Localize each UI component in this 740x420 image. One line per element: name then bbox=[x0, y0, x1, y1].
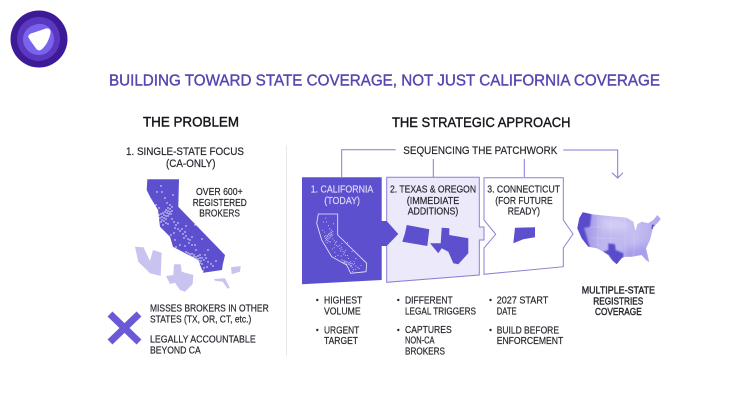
text: problem consequences: MISSES BROKERS IN OTHER bbox=[150, 303, 269, 315]
label: multiple-state registries coverage bbox=[582, 284, 655, 318]
label: over 600+ registered brokers: OVER 600+ bbox=[196, 186, 243, 198]
panel: the strategic approach bbox=[302, 114, 663, 357]
step 2 label: 2. TEXAS & OREGON bbox=[390, 184, 476, 196]
connector lines bbox=[342, 150, 524, 177]
label: multiple-state registries coverage: COVERAGE bbox=[595, 306, 642, 318]
text: problem consequences: STATES (TX, OR, CT, etc.) bbox=[150, 314, 251, 326]
text: problem consequences: BEYOND CA bbox=[150, 344, 201, 356]
map: California outline with dots bbox=[317, 214, 367, 273]
list: Texas and Oregon bullets: NON-CA bbox=[405, 334, 434, 346]
heading: the strategic approach: THE STRATEGIC APPROACH bbox=[392, 114, 570, 130]
step 3: Connecticut bbox=[484, 178, 573, 274]
step 2 label: (IMMEDIATE bbox=[407, 195, 459, 207]
map: Connecticut bbox=[513, 227, 535, 243]
list: Texas and Oregon bullets: BROKERS bbox=[405, 345, 445, 357]
list: Connecticut bullets bbox=[489, 294, 564, 347]
map: Texas bbox=[430, 228, 468, 264]
step 1 label: 1. CALIFORNIA bbox=[311, 184, 373, 196]
map: United States coverage bbox=[577, 212, 660, 264]
label: over 600+ registered brokers: REGISTERED bbox=[193, 197, 247, 209]
list: Connecticut bullets: ENFORCEMENT bbox=[497, 335, 564, 347]
label: over 600+ registered brokers bbox=[193, 186, 247, 220]
label: sequencing the patchwork: SEQUENCING THE PATCHWORK bbox=[403, 145, 558, 157]
step 3 label bbox=[487, 184, 560, 218]
list: California bullets bbox=[316, 294, 363, 347]
list: Texas and Oregon bullets: CAPTURES bbox=[405, 324, 452, 336]
list: Texas and Oregon bullets: LEGAL TRIGGERS bbox=[405, 305, 476, 317]
heading: the problem: THE PROBLEM bbox=[143, 114, 239, 130]
infographic canvas bbox=[10, 10, 660, 356]
label: multiple-state registries coverage: MULTIPLE-STATE bbox=[582, 284, 655, 296]
title: BUILDING TOWARD STATE COVERAGE, NOT JUST CALIFORNIA COVERAGE bbox=[109, 72, 660, 90]
icon: X mark bbox=[110, 314, 139, 342]
step 3 label: READY) bbox=[508, 206, 540, 218]
step 3 label: 3. CONNECTICUT bbox=[487, 184, 560, 196]
label: multiple-state registries coverage: REGISTRIES bbox=[593, 295, 643, 307]
list: Connecticut bullets: 2027 START bbox=[497, 294, 549, 306]
step 2 label: ADDITIONS) bbox=[408, 206, 458, 218]
step 1 label bbox=[311, 184, 373, 207]
list: Connecticut bullets: DATE bbox=[497, 305, 517, 317]
step 1: California bbox=[302, 177, 398, 284]
panel: the problem bbox=[110, 114, 269, 356]
subheading: single-state focus bbox=[126, 146, 244, 170]
step 3 label: (FOR FUTURE bbox=[495, 195, 553, 207]
text: problem consequences: LEGALLY ACCOUNTABLE bbox=[150, 333, 256, 345]
arrow: to multi-state coverage bbox=[563, 150, 623, 178]
list: California bullets: TARGET bbox=[324, 335, 358, 347]
map: Oregon bbox=[402, 225, 429, 246]
map: faded other states bbox=[135, 247, 241, 292]
step 1 label: (TODAY) bbox=[324, 195, 360, 207]
list: California bullets: URGENT bbox=[324, 324, 360, 336]
subheading: single-state focus: (CA-ONLY) bbox=[166, 158, 216, 170]
step 2 label bbox=[390, 184, 476, 218]
list: Connecticut bullets: BUILD BEFORE bbox=[497, 324, 559, 336]
subheading: single-state focus: 1. SINGLE-STATE FOCUS bbox=[126, 146, 244, 158]
list: California bullets: VOLUME bbox=[324, 305, 361, 317]
icon: logo bbox=[10, 10, 68, 68]
list: Texas and Oregon bullets: DIFFERENT bbox=[405, 294, 453, 306]
label: over 600+ registered brokers: BROKERS bbox=[199, 208, 240, 220]
text: problem consequences bbox=[150, 303, 269, 356]
list: California bullets: HIGHEST bbox=[324, 294, 363, 306]
list: Texas and Oregon bullets bbox=[397, 294, 476, 357]
map: California with broker dots bbox=[147, 179, 225, 273]
step 2: Texas and Oregon bbox=[387, 177, 484, 282]
